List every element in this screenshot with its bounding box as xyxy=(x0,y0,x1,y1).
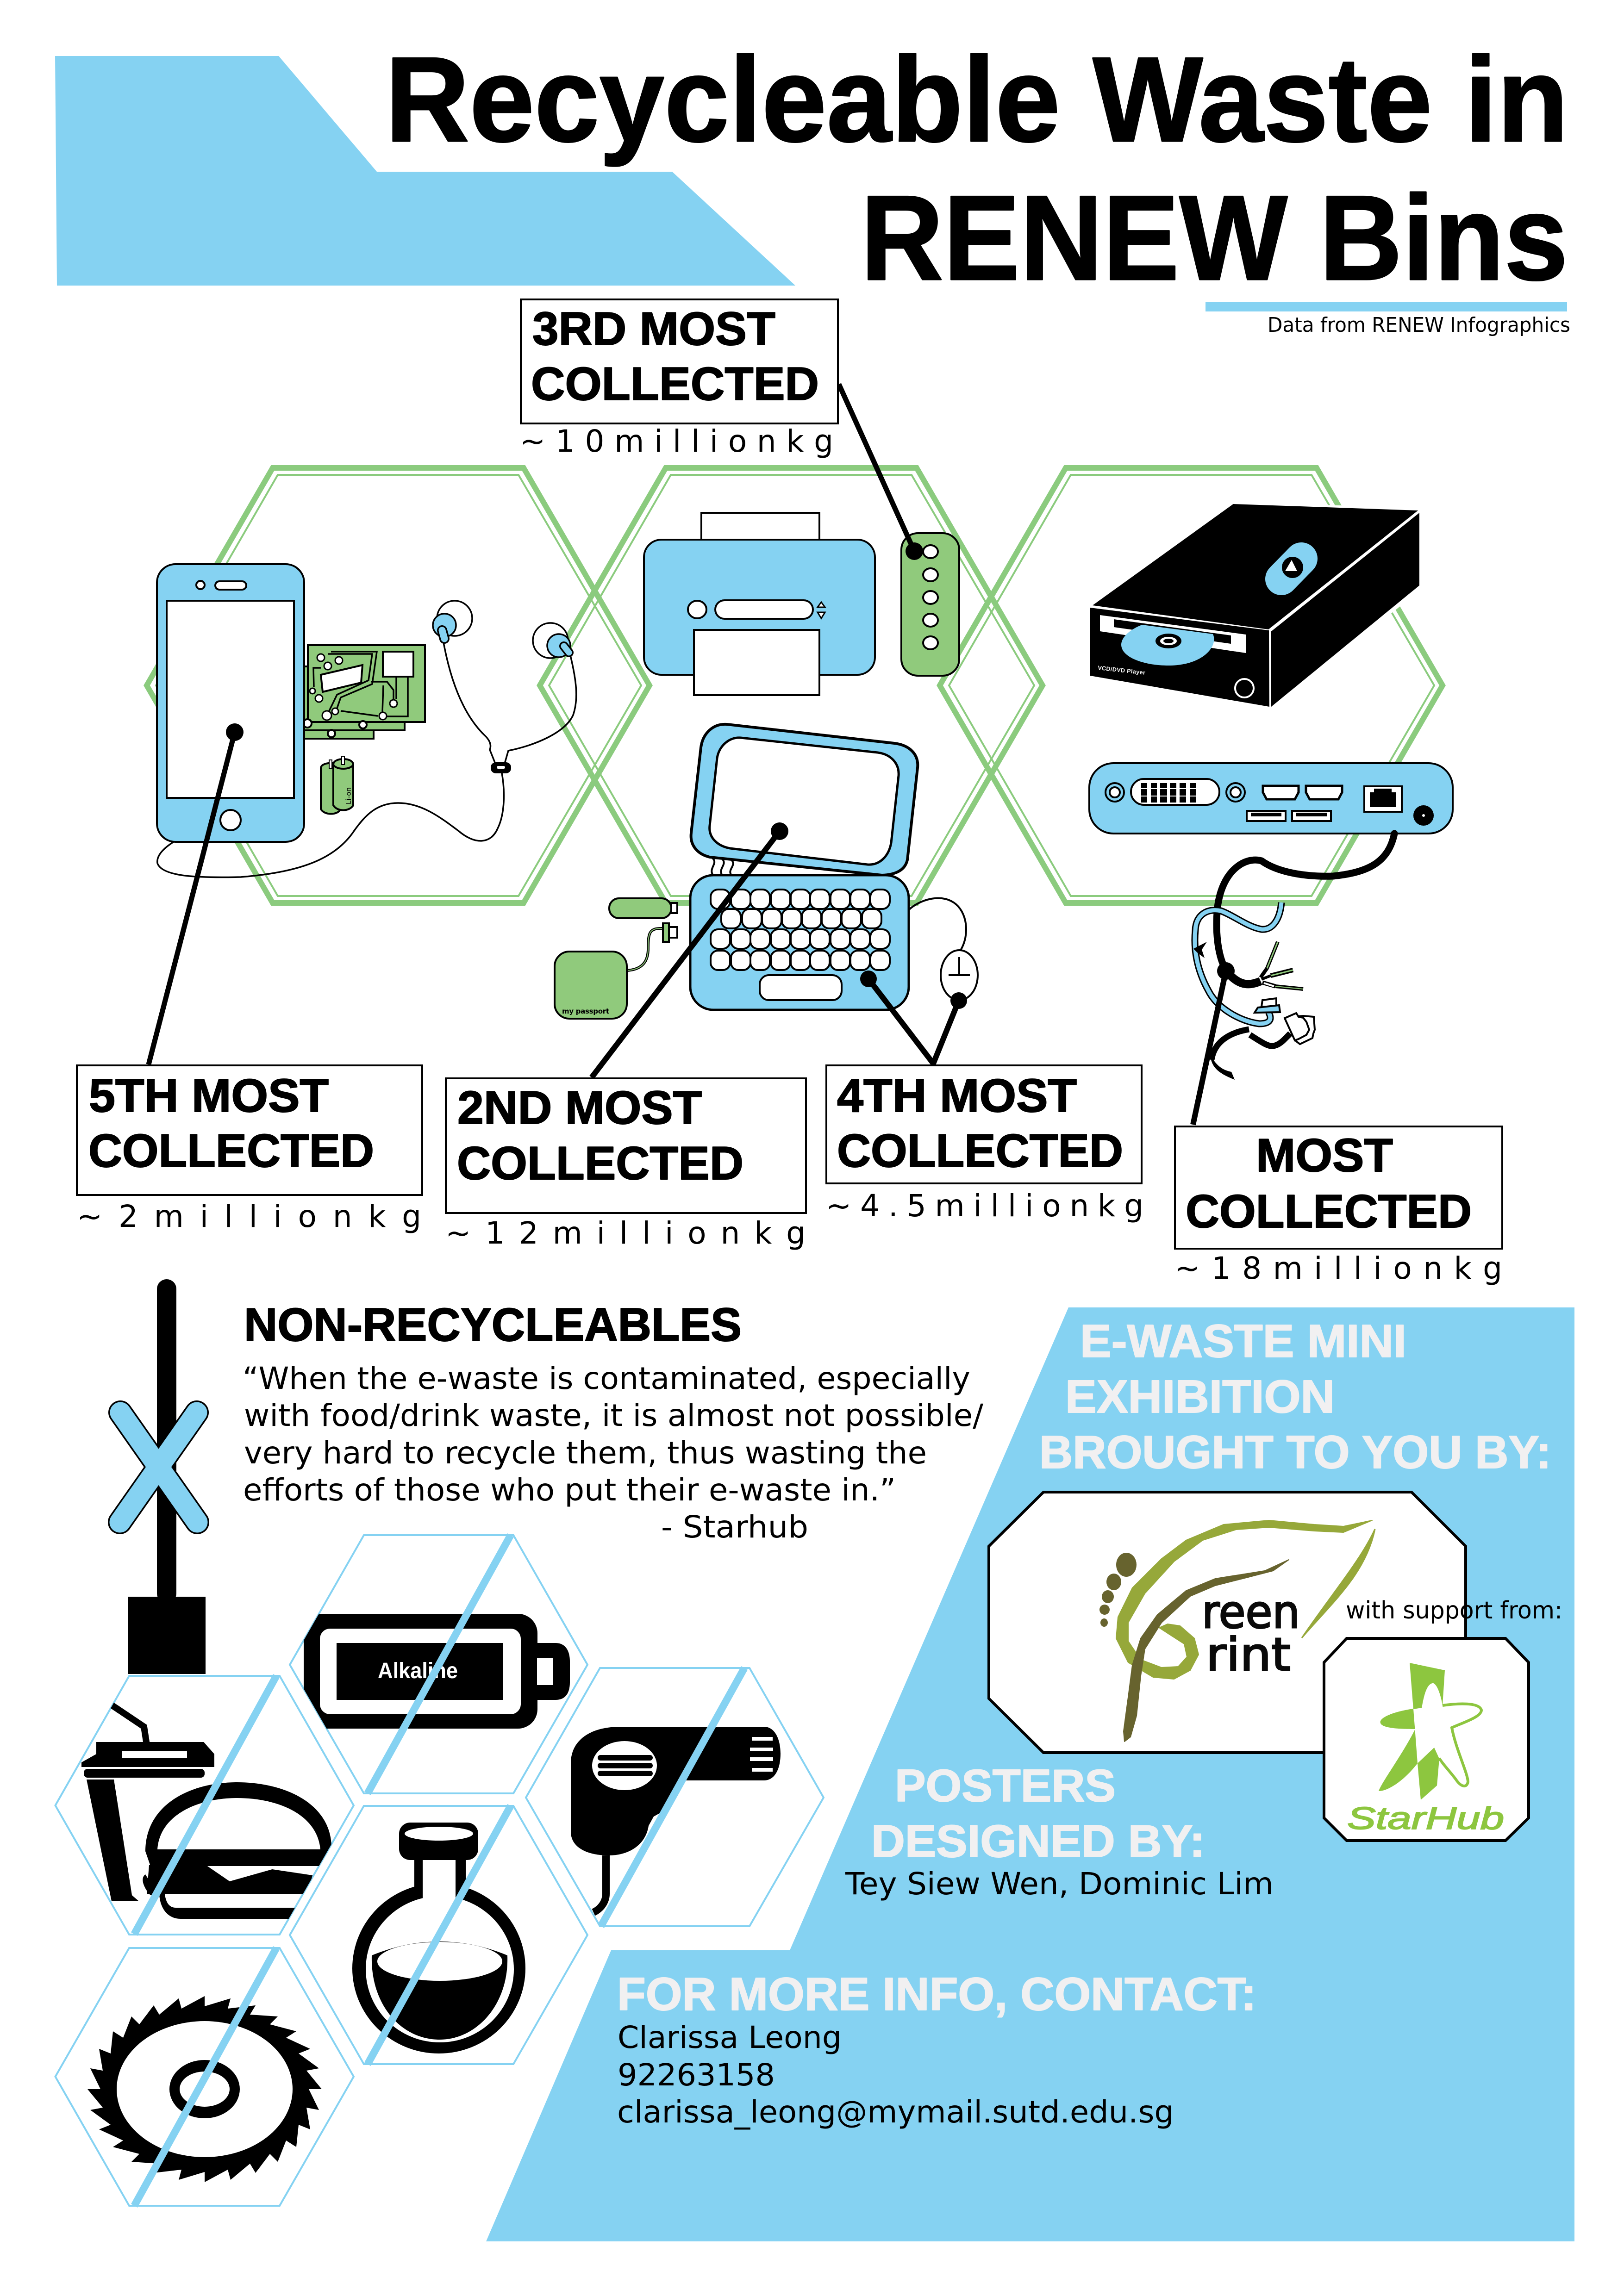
logo: Green Print xyxy=(989,1492,1466,1753)
icon: VCD/DVD player: VCD/DVD Player xyxy=(1098,665,1146,676)
heading: posters designed by: DESIGNED BY: xyxy=(871,1816,1205,1867)
label: 5th most collected xyxy=(77,1065,422,1234)
contact details: clarissa_leong@mymail.sutd.edu.sg xyxy=(617,2094,1174,2130)
icon: remote control xyxy=(901,533,959,676)
blue information panel xyxy=(486,1307,1574,2241)
callout pointer: keyboard and mouse xyxy=(860,971,967,1064)
icon: tangled cables xyxy=(1193,834,1394,1080)
heading: e-waste mini exhibition: EXHIBITION xyxy=(1065,1371,1335,1423)
logo: Green Print: reen xyxy=(1202,1586,1300,1639)
icon: printer xyxy=(644,513,875,695)
heading: posters designed by xyxy=(871,1760,1205,1867)
label: most collected xyxy=(1174,1126,1502,1286)
heading: posters designed by: POSTERS xyxy=(895,1760,1116,1811)
label: 2nd most collected xyxy=(445,1078,806,1251)
label: 3rd most collected xyxy=(520,299,838,459)
title underline bar xyxy=(1206,302,1567,311)
quote from Starhub xyxy=(243,1361,984,1545)
contact details: 92263158 xyxy=(618,2057,775,2093)
title banner shape xyxy=(55,56,795,286)
non-recyclable: saw blade disc xyxy=(56,1948,354,2206)
icon: Li-on batteries xyxy=(321,756,353,814)
heading: e-waste mini exhibition xyxy=(1039,1315,1551,1478)
non-recyclable: alkaline battery: Alkaline xyxy=(378,1659,458,1683)
quote from Starhub: very hard to recycle them, thus wasting the xyxy=(244,1435,927,1471)
icon: portable hard drive xyxy=(555,923,677,1019)
label: 5th most collected: COLLECTED xyxy=(88,1125,374,1177)
non-recyclable: food and drink xyxy=(56,1676,354,1935)
contact details: Clarissa Leong xyxy=(618,2020,842,2055)
label: most collected: COLLECTED xyxy=(1186,1186,1472,1238)
poster designers: Tey Siew Wen, Dominic Lim xyxy=(845,1866,1274,1902)
label: most collected: MOST xyxy=(1256,1130,1393,1182)
icon: smartphone xyxy=(157,564,304,842)
logo: StarHub xyxy=(1324,1638,1529,1841)
label: 2nd most collected: 2ND MOST xyxy=(457,1082,702,1134)
data source credit: Data from RENEW Infographics xyxy=(1268,313,1570,337)
quote from Starhub: with food/drink waste, it is almost not possible/ xyxy=(244,1398,984,1433)
label: 3rd most collected: ~10millionkg xyxy=(520,423,833,459)
label: 4th most collected: COLLECTED xyxy=(837,1125,1123,1177)
label: 2nd most collected: ~12millionkg xyxy=(445,1215,806,1251)
title: Recycleable Waste in xyxy=(385,32,1568,168)
logo: Green Print: rint xyxy=(1206,1629,1291,1681)
label: 5th most collected: ~2millionkg xyxy=(77,1199,421,1234)
non-recyclable: chemical flask xyxy=(290,1806,587,2064)
heading: e-waste mini exhibition: BROUGHT TO YOU BY: xyxy=(1039,1426,1551,1478)
label: 5th most collected: 5TH MOST xyxy=(89,1070,329,1122)
icon: USB stick xyxy=(609,898,677,918)
label: most collected: ~18millionkg xyxy=(1174,1251,1502,1286)
label: 2nd most collected: COLLECTED xyxy=(457,1138,743,1189)
callout pointer: laptop xyxy=(592,822,788,1077)
quote from Starhub: - Starhub xyxy=(661,1509,808,1545)
green hexagon frames xyxy=(147,468,1443,903)
heading: non-recycleables: NON-RECYCLEABLES xyxy=(244,1299,742,1351)
title: RENEW Bins xyxy=(861,171,1568,305)
heading: e-waste mini exhibition: E-WASTE MINI xyxy=(1080,1315,1406,1367)
title xyxy=(385,32,1568,305)
icon: earphones with cable xyxy=(157,601,576,877)
label: 4th most collected: ~4.5millionkg xyxy=(826,1188,1143,1224)
callout pointer: remote control xyxy=(839,384,923,560)
icon: computer mouse xyxy=(909,898,978,1000)
quote from Starhub: efforts of those who put their e-waste in.” xyxy=(243,1472,896,1508)
label: 4th most collected: 4TH MOST xyxy=(837,1070,1077,1122)
label: 3rd most collected: COLLECTED xyxy=(531,358,819,410)
icon: Li-on batteries: Li-on xyxy=(344,787,353,804)
support text: with support from: xyxy=(1346,1597,1562,1624)
callout pointer: smartphone xyxy=(149,723,244,1064)
icon: laptop xyxy=(690,724,918,1010)
icon: portable hard drive: my passport xyxy=(562,1007,609,1015)
icon: device back panel with ports xyxy=(1089,763,1453,834)
label: 3rd most collected: 3RD MOST xyxy=(532,303,775,355)
icon: circuit boards xyxy=(301,645,425,739)
quote from Starhub: “When the e-waste is contaminated, especially xyxy=(243,1361,970,1396)
icon: VCD/DVD player xyxy=(1088,502,1423,710)
icon: crossed-out bin pole xyxy=(120,1279,206,1674)
logo: StarHub: StarHub xyxy=(1347,1801,1504,1836)
heading: for more info: FOR MORE INFO, CONTACT: xyxy=(617,1968,1256,2020)
label: 4th most collected xyxy=(826,1065,1143,1224)
contact details xyxy=(617,2020,1174,2130)
non-recyclable: hair dryer xyxy=(526,1668,824,1926)
callout pointer: cables xyxy=(1193,962,1235,1125)
non-recyclable: alkaline battery xyxy=(290,1535,587,1793)
